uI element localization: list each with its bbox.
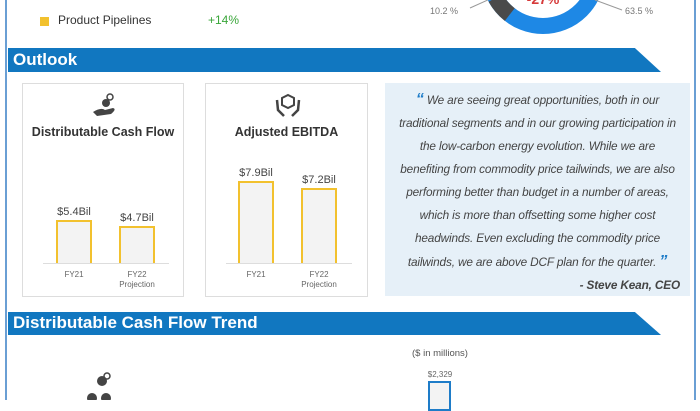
bar chart: $7.9Bil (239, 167, 273, 179)
callout: CEO quote: “ We are seeing great opportunities, both in our (416, 91, 659, 108)
bar chart: Projection (301, 280, 337, 289)
donut chart: 63.5 % (625, 6, 653, 16)
donut chart: 10.2 % (430, 6, 458, 16)
panel: distributable cash flow (22, 83, 184, 297)
bar: 2329 (428, 370, 452, 411)
callout: CEO quote: tailwinds, we are above DCF plan for the quarter. ” (408, 253, 667, 270)
bar chart (226, 167, 352, 289)
bar chart: $5.4Bil (57, 206, 91, 218)
legend item: product pipelines: Product Pipelines (58, 13, 151, 27)
chart label: ($ in millions) (412, 348, 468, 359)
callout: CEO quote: headwinds. Even excluding the commodity price (415, 231, 660, 245)
callout: CEO quote: the low-carbon energy evolution. While we are (420, 139, 655, 153)
icon: hands with box (276, 94, 300, 117)
bar chart: FY22 (127, 270, 147, 279)
bar chart: $7.2Bil (302, 174, 336, 186)
heading: Adjusted EBITDA (235, 125, 338, 139)
icon: hand with coins (93, 93, 115, 116)
bar: 2329: $2,329 (428, 370, 452, 379)
bar chart: FY21 (246, 270, 266, 279)
icon: coins (87, 372, 111, 400)
heading: Outlook: Outlook (13, 50, 77, 69)
callout: CEO quote: benefiting from commodity price tailwinds, we are also (400, 162, 675, 176)
callout: CEO quote: - Steve Kean, CEO (580, 278, 680, 292)
donut chart (430, 0, 653, 34)
callout: CEO quote: traditional segments and in our growing participation in (399, 116, 676, 130)
bar chart: Projection (119, 280, 155, 289)
bar chart: FY21 (64, 270, 84, 279)
callout: CEO quote (385, 83, 690, 296)
panel: adjusted EBITDA (205, 83, 368, 297)
heading: Distributable Cash Flow Trend: Distributable Cash Flow Trend (13, 313, 258, 332)
bar chart (43, 206, 169, 289)
legend item: product pipelines (40, 13, 239, 27)
bar chart: FY22 (309, 270, 329, 279)
callout: CEO quote: performing better than budget in a number of areas, (406, 185, 669, 199)
heading: Distributable Cash Flow (32, 125, 174, 139)
bar chart: $4.7Bil (120, 212, 154, 224)
heading: Outlook (8, 48, 661, 72)
legend item: product pipelines: +14% (208, 13, 239, 27)
callout: CEO quote: which is more than offsetting some higher cost (420, 208, 655, 222)
heading: Distributable Cash Flow Trend (8, 312, 661, 335)
